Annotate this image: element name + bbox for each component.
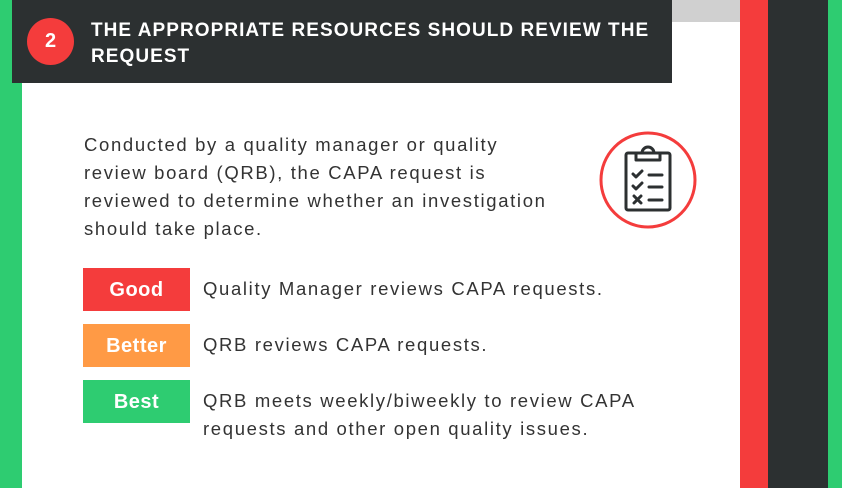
text: Good (109, 279, 164, 301)
title (91, 20, 649, 67)
intro paragraph (84, 134, 547, 239)
rating: better (83, 324, 488, 367)
rating: best (83, 380, 636, 439)
step number circle: 2 (45, 30, 56, 52)
text: requests and other open quality issues. (203, 418, 589, 439)
text: Best (114, 391, 159, 413)
text: Quality Manager reviews CAPA requests. (203, 278, 604, 299)
text: Better (106, 335, 167, 357)
header bar (12, 0, 672, 83)
text: QRB reviews CAPA requests. (203, 334, 488, 355)
title: REQUEST (91, 46, 190, 67)
step number circle (27, 18, 74, 65)
intro paragraph: review board (QRB), the CAPA request is (84, 162, 486, 183)
intro paragraph: Conducted by a quality manager or quality (84, 134, 498, 155)
intro paragraph: reviewed to determine whether an investigation (84, 190, 547, 211)
title: THE APPROPRIATE RESOURCES SHOULD REVIEW THE (91, 20, 649, 41)
rating: good (83, 268, 604, 311)
text: QRB meets weekly/biweekly to review CAPA (203, 390, 636, 411)
intro paragraph: should take place. (84, 218, 263, 239)
icon: clipboard checklist (600, 132, 696, 228)
